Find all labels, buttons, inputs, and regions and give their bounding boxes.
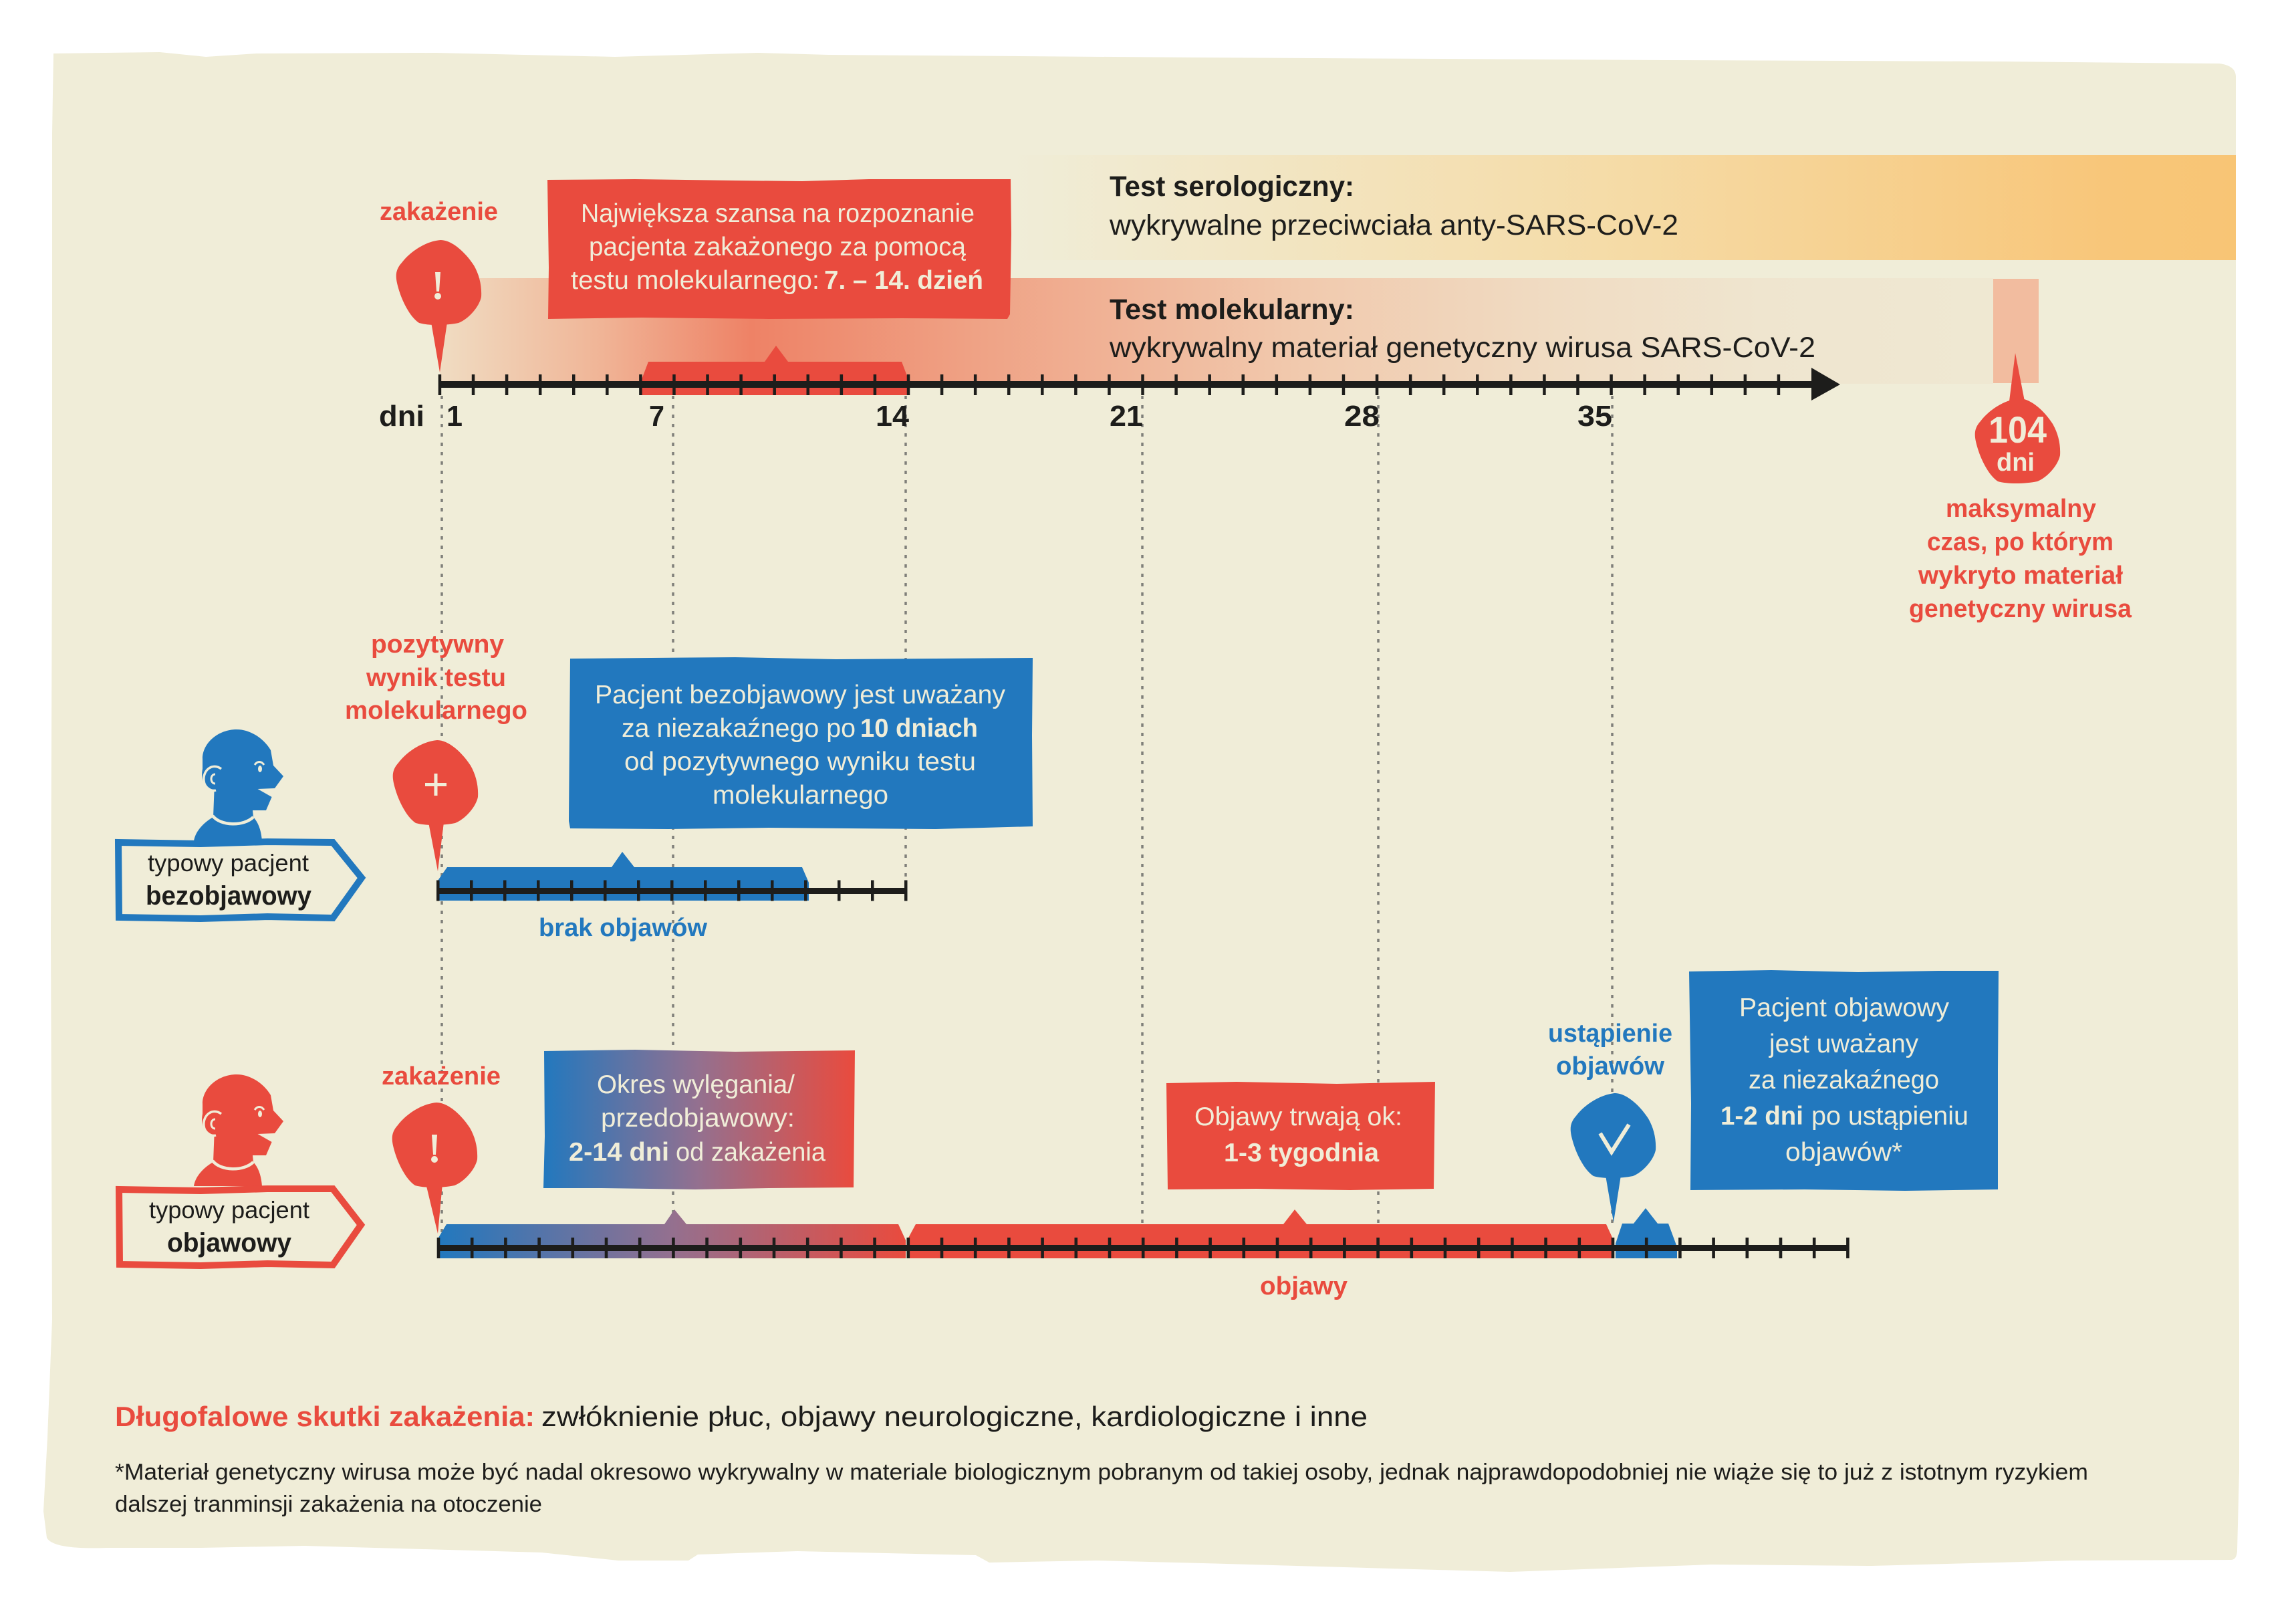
- sign: symptomatic patient: objawowy: [167, 1228, 292, 1258]
- pin: symptoms resolved: [1571, 1093, 1656, 1222]
- axis: symptomatic: [437, 1245, 1850, 1251]
- sign: asymptomatic patient: [118, 842, 362, 919]
- callout: symptoms duration: Objawy trwają ok:: [1194, 1103, 1402, 1131]
- footnote: [115, 1460, 2088, 1517]
- 104 days pin: dni: [1997, 449, 2035, 477]
- axis labels: 7: [649, 400, 664, 433]
- text: maximum time: maksymalny: [1946, 495, 2096, 523]
- test labels: molecular: Test molekularny:: [1110, 294, 1354, 326]
- label: no symptoms: brak objawów: [539, 914, 707, 942]
- callout: symptomatic patient: za niezakaźnego: [1749, 1066, 1939, 1095]
- 104 days pin: [1975, 353, 2060, 483]
- callout: asymptomatic patient: [569, 657, 1033, 829]
- axis: asymptomatic: [436, 888, 908, 894]
- axis labels: 35: [1577, 400, 1612, 433]
- band: molecular test: [440, 278, 1993, 384]
- axis labels: 28: [1344, 400, 1380, 433]
- callout: symptomatic patient: Pacjent objawowy: [1739, 994, 1950, 1022]
- footnote: *Materiał genetyczny wirusa może być nadal okresowo wykrywalny w materiale biologicznym pobranym od takiej osoby, jednak najprawdopodobniej nie wiąże się to już z istotnym ryzykiem: [115, 1460, 2088, 1485]
- axis labels: 1: [447, 400, 463, 433]
- sign: symptomatic patient: typowy pacjent: [149, 1196, 309, 1224]
- callout: incubation period: [543, 1050, 855, 1189]
- callout: symptoms duration: 1-3 tygodnia: [1224, 1139, 1379, 1167]
- label: positive test: wynik testu: [366, 664, 506, 692]
- 104 days pin: 104: [1989, 409, 2047, 451]
- icon: symptomatic patient head: [194, 1074, 283, 1186]
- label: positive test: pozytywny: [371, 630, 504, 659]
- sign: symptomatic patient: [119, 1189, 361, 1266]
- axis labels: 21: [1110, 400, 1143, 433]
- callout: best chance for molecular test: pacjenta zakażonego za pomocą: [589, 233, 966, 261]
- text: maximum time: wykryto materiał: [1918, 562, 2123, 590]
- label: symptoms resolved: [1548, 1020, 1672, 1080]
- label: infection top: zakażenie: [380, 198, 498, 226]
- bar: incubation gradient: [438, 1210, 906, 1258]
- band end: 104 days marker block: [1993, 279, 2039, 383]
- pin: infection bottom: [392, 1103, 477, 1234]
- pin: positive test: [393, 740, 478, 871]
- callout: best chance for molecular test: [547, 179, 1011, 319]
- axis labels: dni: [379, 400, 424, 433]
- dotted guide lines for days: [442, 396, 1612, 1234]
- long-term effects: [115, 1401, 1368, 1432]
- label: positive test: molekularnego: [345, 697, 527, 725]
- sign: asymptomatic patient: bezobjawowy: [146, 881, 312, 911]
- callout: symptomatic patient: jest uważany: [1769, 1030, 1918, 1058]
- long-term effects: zwłóknienie płuc, objawy neurologiczne, kardiologiczne i inne: [541, 1401, 1368, 1432]
- callout: asymptomatic patient: 10 dniach: [860, 714, 978, 743]
- pin: infection top: [396, 240, 481, 372]
- test labels: molecular: [1109, 294, 1815, 364]
- band: serological test: [1011, 155, 2236, 260]
- text: maximum time: [1909, 495, 2132, 623]
- icon: asymptomatic patient head: [194, 729, 283, 841]
- callout: asymptomatic patient: Pacjent bezobjawowy jest uważany: [595, 681, 1005, 709]
- callout: asymptomatic patient: za niezakaźnego po: [622, 714, 856, 743]
- bar: no symptoms: [438, 852, 809, 901]
- axis labels: 14: [876, 400, 910, 433]
- bar: after symptoms blue: [1616, 1208, 1677, 1258]
- callout: symptomatic patient: [1689, 970, 1999, 1191]
- axis labels: [379, 400, 1612, 433]
- test labels: serological: wykrywalne przeciwciała anty-SARS-CoV-2: [1109, 209, 1678, 241]
- callout: symptoms duration: [1166, 1082, 1435, 1190]
- long-term effects: Długofalowe skutki zakażenia:: [115, 1401, 535, 1432]
- callout: incubation period: Okres wylęgania/: [597, 1070, 795, 1099]
- bar: symptoms red: [907, 1210, 1614, 1258]
- callout: best chance for molecular test: Największa szansa na rozpoznanie: [581, 199, 975, 228]
- callout: best chance for molecular test: 7. – 14. dzień: [824, 266, 983, 295]
- callout: symptomatic patient: 1-2 dni: [1720, 1102, 1803, 1131]
- callout: incubation period: od zakażenia: [676, 1138, 825, 1167]
- callout: symptomatic patient: objawów*: [1785, 1138, 1902, 1167]
- test labels: molecular: wykrywalny materiał genetyczny wirusa SARS-CoV-2: [1109, 332, 1815, 364]
- text: maximum time: czas, po którym: [1927, 528, 2114, 556]
- footnote: dalszej tranminsji zakażenia na otoczenie: [115, 1492, 542, 1517]
- label: symptoms resolved: objawów: [1556, 1052, 1664, 1080]
- callout: symptomatic patient: po ustąpieniu: [1811, 1102, 1968, 1131]
- sign: asymptomatic patient: typowy pacjent: [148, 849, 309, 877]
- callout: best chance for molecular test: testu molekularnego:: [571, 266, 819, 295]
- label: symptoms resolved: ustąpienie: [1548, 1020, 1672, 1048]
- test labels: serological: [1109, 170, 1678, 241]
- callout: incubation period: przedobjawowy:: [601, 1104, 795, 1133]
- callout: asymptomatic patient: od pozytywnego wyniku testu: [624, 748, 976, 776]
- callout: incubation period: 2-14 dni: [569, 1138, 669, 1167]
- test labels: serological: Test serologiczny:: [1110, 170, 1354, 203]
- label: symptoms: objawy: [1260, 1272, 1348, 1300]
- callout: asymptomatic patient: molekularnego: [713, 781, 888, 810]
- bar: days 7-14: [641, 346, 909, 395]
- main axis with arrow: [438, 368, 1840, 400]
- label: infection bottom: zakażenie: [382, 1062, 501, 1090]
- text: maximum time: genetyczny wirusa: [1909, 595, 2132, 623]
- label: positive test: [345, 630, 527, 725]
